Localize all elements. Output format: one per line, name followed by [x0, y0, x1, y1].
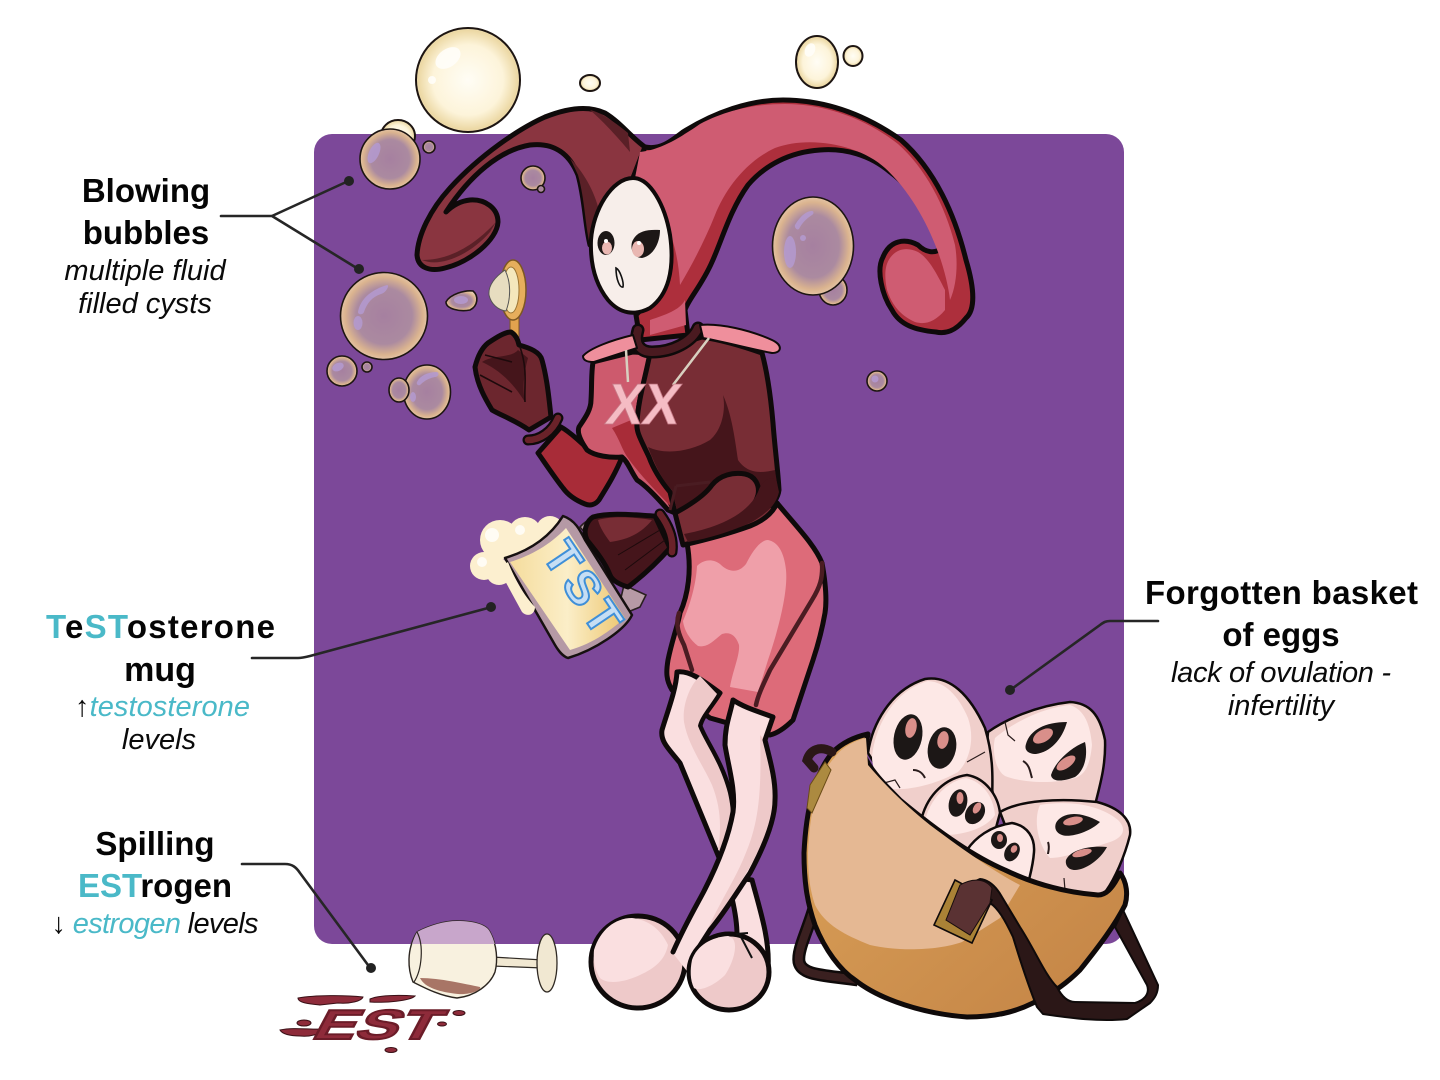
- bubble: tiny near hat: [423, 141, 435, 153]
- description: multiple fluid: [64, 255, 226, 287]
- jester skirt: [667, 503, 826, 735]
- wine glass stem: [492, 957, 545, 968]
- description with up arrow: ↑testosterone: [75, 691, 250, 723]
- description line two: levels: [122, 724, 196, 756]
- basket of eggs: [799, 678, 1158, 1020]
- egg top right eyes: [1005, 722, 1086, 781]
- heading line one: Blowing: [82, 172, 210, 209]
- heading line two: of eggs: [1222, 616, 1340, 653]
- beer mug: [470, 516, 646, 658]
- wine glass foot: [537, 934, 557, 992]
- magnifier bubble wand: [489, 260, 526, 337]
- necklace cords: [626, 338, 709, 385]
- jester face mask: [591, 178, 672, 313]
- bubble: large cream top: [416, 28, 520, 132]
- egg top right: [987, 702, 1105, 815]
- mug label TST: TST: [532, 532, 635, 649]
- left shoulder pad: [583, 335, 637, 362]
- leader dot: [1005, 685, 1015, 695]
- mug handle: [580, 519, 646, 612]
- foam drip: [498, 562, 535, 615]
- jester left arm sleeve: [538, 427, 622, 505]
- egg large left: [868, 678, 992, 835]
- wand ring: [500, 260, 526, 320]
- wine residue: [420, 978, 480, 994]
- jester torso light half: [578, 352, 675, 513]
- basket light panel: [808, 738, 1020, 949]
- face mouth: [616, 268, 623, 287]
- egg smallest: [967, 823, 1034, 884]
- basket side clasp: [807, 762, 831, 813]
- leader dot: [366, 963, 376, 973]
- bubble: pair lower left: [389, 365, 450, 419]
- jester torso shade strip: [612, 418, 677, 508]
- bubble: tiny cream right: [844, 46, 862, 66]
- mug beer: [510, 528, 625, 650]
- spill droplets and streaks: [280, 995, 465, 1052]
- callout: blowing bubbles: [64, 172, 364, 320]
- face right eye: [631, 230, 660, 258]
- jester right sleeve shadow: [684, 478, 779, 542]
- face left eye: [598, 231, 614, 255]
- basket front strap: [960, 879, 1158, 1020]
- egg lower right: [1000, 800, 1130, 895]
- hat left dark half: [417, 108, 645, 269]
- wand film bubble: [489, 270, 510, 311]
- heading: Spilling: [95, 825, 215, 862]
- basket buckle: [934, 880, 992, 943]
- jester torso dark half: [637, 337, 779, 527]
- egg smallest eyes: [991, 831, 1023, 864]
- bubble: flat near magnifier: [446, 291, 477, 311]
- wine glass: [409, 921, 557, 998]
- basket bowl: [804, 734, 1127, 1017]
- jester garter straps: [677, 563, 822, 705]
- bubble: cream small near top: [580, 75, 600, 91]
- bubble: tiny left: [362, 362, 372, 372]
- callout: spilling estrogen: [52, 825, 376, 973]
- necklace: [602, 338, 709, 437]
- jester back leg shading: [684, 676, 731, 850]
- spill lettering: EST: [305, 1001, 454, 1048]
- bubble: small left: [327, 356, 357, 386]
- wine glass bowl: [409, 921, 497, 998]
- basket top strap: [807, 749, 832, 768]
- jester back leg: [662, 672, 768, 975]
- description line two: infertility: [1228, 690, 1336, 722]
- right glove cuff: [660, 514, 672, 552]
- character: jester: [417, 100, 973, 1010]
- description with down arrow: ↓ estrogen levels: [52, 908, 258, 940]
- egg small middle eyes: [946, 787, 989, 828]
- hat right salmon highlight: [635, 104, 957, 300]
- callout: testosterone mug: [46, 602, 496, 756]
- egg small middle: [922, 775, 1000, 850]
- jester torso deep shadow: [648, 395, 778, 525]
- jester collar: [637, 328, 698, 352]
- heading line two: ESTrogen: [78, 867, 232, 904]
- basket left strap inner: [799, 905, 858, 980]
- bubble: cream behind upper-left: [381, 120, 415, 152]
- wand handle: [510, 315, 519, 337]
- description: lack of ovulation -: [1171, 657, 1391, 689]
- heading: Forgotten basket: [1145, 574, 1418, 611]
- jester left glove: [475, 332, 558, 440]
- callout: forgotten basket: [1005, 574, 1418, 722]
- panel: purple background square: [314, 134, 1124, 944]
- leader lines to bubbles: [221, 183, 355, 267]
- leader line to glass: [242, 864, 368, 965]
- jester right glove: [585, 514, 672, 587]
- bubble: large right of hat: [772, 197, 854, 305]
- leader dot: [486, 602, 496, 612]
- egg lower right eyes: [1048, 814, 1107, 890]
- wand lens: [503, 267, 519, 313]
- hat neck salmon: [650, 300, 686, 335]
- bubble: inside hat curve: [521, 166, 545, 192]
- description line two: filled cysts: [78, 288, 212, 320]
- hat curl salmon: [885, 249, 945, 323]
- jester front leg outline: [673, 700, 775, 958]
- spilled wine EST: [280, 995, 465, 1052]
- egg large left eyes: [884, 712, 985, 788]
- heading line two: mug: [124, 651, 196, 689]
- jester right sleeve: [675, 473, 777, 545]
- bubbles on white and purple: [327, 28, 887, 419]
- jester left foot: [591, 916, 685, 1008]
- heading: TeSTosterone: [46, 608, 275, 645]
- heading line two: bubbles: [83, 214, 209, 251]
- basket buckle strap: [946, 880, 992, 935]
- wine glass upper tint on purple: [412, 921, 495, 944]
- foam: [470, 516, 564, 585]
- jester belt line: [670, 482, 710, 510]
- mug body: [505, 516, 632, 658]
- bubble: upper left cluster: [360, 129, 420, 189]
- jester front leg: [672, 700, 775, 975]
- bubble: far right small: [867, 371, 887, 391]
- leader line to mug: [252, 608, 488, 658]
- leader dot lower: [354, 264, 364, 274]
- jester right foot: [689, 933, 769, 1010]
- wine glass rim: [414, 932, 421, 982]
- leader line to basket: [1013, 621, 1158, 688]
- right shoulder pad: [700, 325, 780, 353]
- basket left strap: [799, 905, 858, 980]
- hat left shading: [422, 110, 630, 262]
- jester front leg shading: [705, 735, 774, 935]
- jester skirt highlight: [683, 540, 786, 692]
- bubble: large left: [340, 272, 428, 360]
- bubble: cream oval right: [796, 36, 838, 88]
- hat right red half: [633, 100, 973, 340]
- leader dot upper: [344, 176, 354, 186]
- necklace XX pendant: XX: [602, 373, 686, 437]
- glove cuff: [528, 418, 558, 440]
